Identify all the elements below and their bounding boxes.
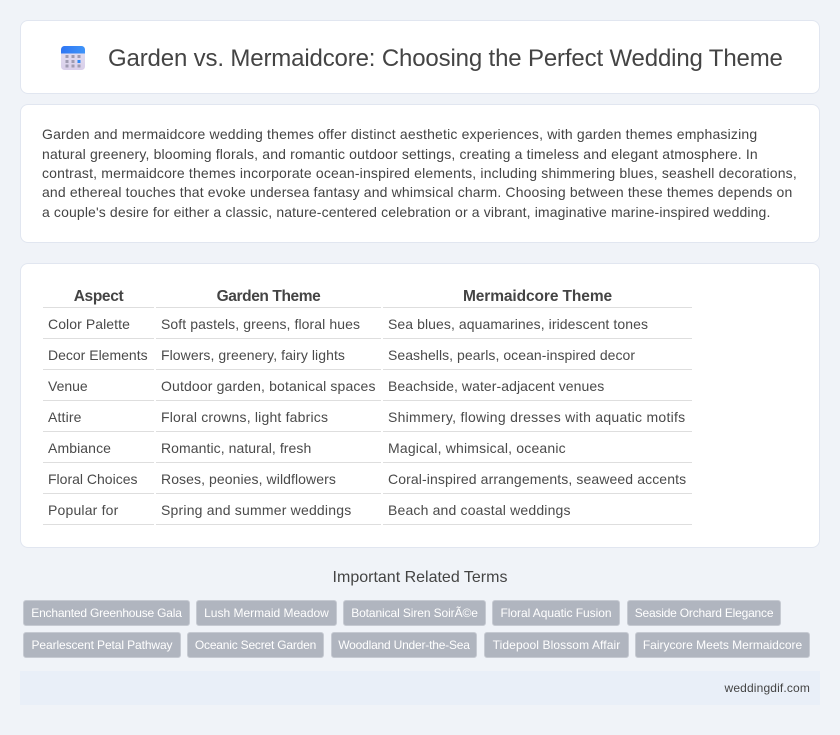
related term tags: Fairycore Meets Mermaidcore [643, 638, 802, 652]
comparison table: Floral Choices [48, 471, 137, 487]
comparison table: Color Palette [48, 316, 130, 332]
comparison table: Decor Elements [48, 347, 148, 363]
comparison table: Floral crowns, light fabrics [161, 409, 328, 425]
related term tags: Seaside Orchard Elegance [635, 606, 773, 620]
comparison table: Magical, whimsical, oceanic [388, 440, 566, 456]
icon: calendar [61, 46, 85, 70]
comparison table: Beach and coastal weddings [388, 502, 571, 518]
intro paragraph: and ethereal touches that evoke undersea fantasy and whimsical charm. Choosing between these themes depends on [42, 184, 792, 200]
related term tags: Pearlescent Petal Pathway [32, 638, 172, 652]
comparison table: Venue [48, 378, 88, 394]
comparison table: Outdoor garden, botanical spaces [161, 378, 376, 394]
related term tags: Tidepool Blossom Affair [493, 638, 620, 652]
comparison table: Ambiance [48, 440, 111, 456]
comparison table: Flowers, greenery, fairy lights [161, 347, 345, 363]
comparison table: Spring and summer weddings [161, 502, 351, 518]
intro paragraph: natural greenery, blooming florals, and romantic outdoor settings, creating a timeless and elegant atmosphere. In [42, 146, 758, 162]
related term tags: Botanical Siren SoirÃ©e [351, 606, 478, 620]
comparison table: Attire [48, 409, 82, 425]
panel: intro text [20, 104, 820, 243]
comparison table [43, 288, 692, 525]
comparison table: Seashells, pearls, ocean-inspired decor [388, 347, 635, 363]
related term tags: Oceanic Secret Garden [195, 638, 316, 652]
comparison table: Aspect [74, 288, 123, 305]
header card [20, 20, 820, 94]
title: Garden vs. Mermaidcore: Choosing the Perfect Wedding Theme [108, 45, 783, 72]
intro paragraph [42, 126, 797, 220]
comparison table: Romantic, natural, fresh [161, 440, 311, 456]
comparison table: Sea blues, aquamarines, iridescent tones [388, 316, 648, 332]
footer bar [20, 671, 820, 705]
comparison table: Soft pastels, greens, floral hues [161, 316, 360, 332]
comparison table: Popular for [48, 502, 118, 518]
footer source text: weddingdif.com [725, 681, 810, 695]
related term tags: Floral Aquatic Fusion [500, 606, 612, 620]
comparison table: Coral-inspired arrangements, seaweed accents [388, 471, 686, 487]
heading: related terms: Important Related Terms [333, 569, 507, 586]
intro paragraph: contrast, mermaidcore themes incorporate ocean-inspired elements, including shimmering blues, seashell decorations, [42, 165, 797, 181]
related term tags: Woodland Under-the-Sea [338, 638, 470, 652]
related term tags [23, 600, 810, 658]
comparison table: Beachside, water-adjacent venues [388, 378, 604, 394]
panel: comparison table card [20, 263, 820, 548]
related term tags: Lush Mermaid Meadow [204, 606, 329, 620]
comparison table: Garden Theme [217, 288, 320, 305]
comparison table: Mermaidcore Theme [463, 288, 612, 305]
related term tags: Enchanted Greenhouse Gala [31, 606, 182, 620]
comparison table: Shimmery, flowing dresses with aquatic motifs [388, 409, 685, 425]
comparison table: Roses, peonies, wildflowers [161, 471, 336, 487]
intro paragraph: a couple's desire for either a classic, nature-centered celebration or a vibrant, imaginative marine-inspired wedding. [42, 204, 770, 220]
intro paragraph: Garden and mermaidcore wedding themes offer distinct aesthetic experiences, with garden themes emphasizing [42, 126, 757, 142]
